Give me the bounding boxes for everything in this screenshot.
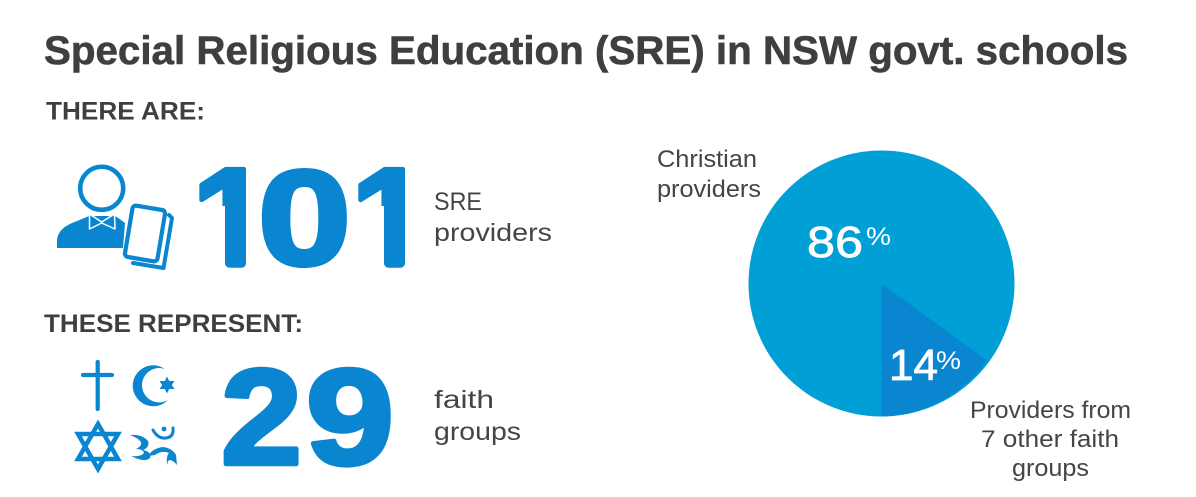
value: 86%: 86 (807, 218, 863, 267)
label: Christian providers: providers (657, 176, 761, 203)
label: Christian providers (657, 146, 761, 203)
value: 86%: % (866, 223, 891, 251)
label: providers from 7 other faith groups (970, 397, 1131, 482)
icon: SRE provider with cards (57, 167, 172, 268)
value: 14%: 14 (889, 341, 938, 390)
number: 101: 0 (258, 142, 351, 294)
slice: Christian providers 86% (748, 150, 1014, 416)
number: 29: 9 (306, 341, 394, 493)
label: providers from 7 other faith groups: groups (1012, 455, 1089, 482)
icon: cross (83, 362, 112, 409)
label: providers from 7 other faith groups: 7 other faith (981, 426, 1119, 453)
label: faith groups (434, 386, 521, 446)
number: 29: 2 (221, 341, 302, 493)
label: faith groups: groups (434, 418, 521, 446)
icon: star of David (78, 424, 118, 469)
label: faith groups: faith (434, 386, 494, 414)
value: 86% (807, 218, 891, 267)
pie chart (748, 150, 1014, 416)
number: 101 (199, 166, 405, 268)
number: 101: 1 (351, 138, 429, 296)
heading: there are: THERE ARE: (46, 98, 205, 126)
value: 14%: % (936, 347, 961, 375)
slice: other faith groups 14% (882, 284, 987, 416)
number: 29 (221, 341, 394, 493)
label: SRE providers: SRE (434, 188, 482, 216)
icon: om symbol (130, 427, 177, 465)
label: SRE providers (434, 188, 552, 247)
icon: crescent and star (133, 365, 174, 406)
label: providers from 7 other faith groups: Providers from (970, 397, 1131, 424)
label: Christian providers: Christian (657, 146, 757, 173)
heading: these represent: THESE REPRESENT: (44, 310, 303, 338)
title: Special Religious Education (SRE) in NSW govt. schools (44, 29, 1128, 73)
icons: faith symbols (78, 362, 177, 469)
label: SRE providers: providers (434, 219, 552, 247)
number: 101: 1 (192, 138, 270, 296)
value: 14% (889, 341, 961, 390)
